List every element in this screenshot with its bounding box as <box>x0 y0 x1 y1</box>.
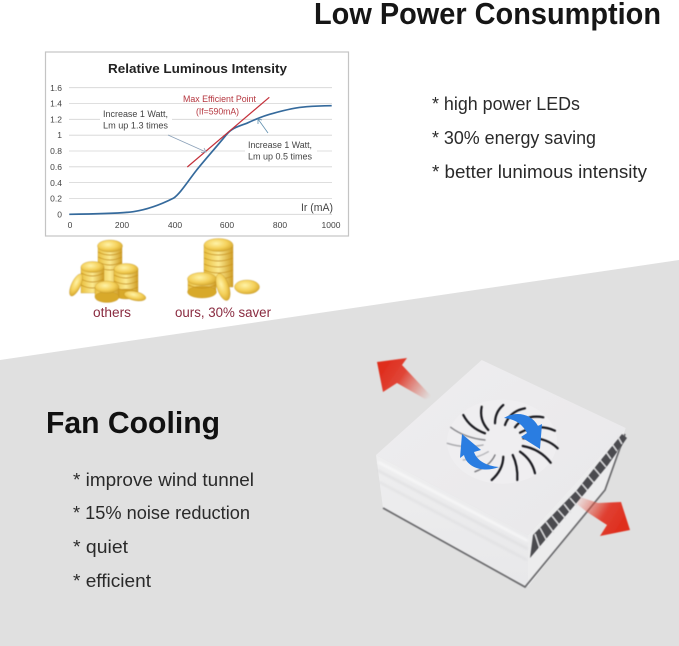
chart: relative luminous intensity: Relative Luminous Intensity <box>108 61 288 76</box>
chart: relative luminous intensity: 600 <box>220 220 234 230</box>
chart: relative luminous intensity: 1.2 <box>50 114 62 124</box>
text: cooling bullets: * quiet <box>73 537 128 557</box>
text: power bullets <box>432 94 647 182</box>
chart: relative luminous intensity: 1000 <box>322 220 341 230</box>
box drop shadow edges <box>383 434 625 587</box>
chart: relative luminous intensity: 0.6 <box>50 162 62 172</box>
chart: relative luminous intensity: 1 <box>57 130 62 140</box>
arrow: to flat section <box>258 119 268 133</box>
heading: fan cooling: Fan Cooling <box>46 405 220 440</box>
efficiency curve <box>69 106 332 214</box>
callout: max efficient point: (If=590mA) <box>196 106 239 116</box>
text: ours caption: ours, 30% saver <box>175 305 271 320</box>
chart: relative luminous intensity: 0.8 <box>50 146 62 156</box>
text: power bullets: * 30% energy saving <box>432 128 596 148</box>
icon: others coin pile <box>67 240 147 303</box>
chart: relative luminous intensity: 0 <box>68 220 73 230</box>
panel: grey diagonal background <box>0 260 679 646</box>
chart label masks <box>100 108 317 164</box>
chart: relative luminous intensity: 1.4 <box>50 98 62 108</box>
text: power bullets: * high power LEDs <box>432 94 580 114</box>
callout: increase 0.5 times: Increase 1 Watt, <box>248 140 312 150</box>
text: cooling bullets: * improve wind tunnel <box>73 470 254 490</box>
chart: relative luminous intensity: 800 <box>273 220 287 230</box>
chart: relative luminous intensity: 0 <box>57 210 62 220</box>
text: others caption: others <box>93 305 131 320</box>
fan recess <box>447 400 557 484</box>
arrow: red exhaust upper left <box>377 358 432 399</box>
callout: max efficient point <box>183 94 256 116</box>
vent grille <box>530 434 627 558</box>
box rim highlights <box>377 462 528 560</box>
axis label: Ir (mA) <box>301 202 333 214</box>
chart: relative luminous intensity: 200 <box>115 220 129 230</box>
callout: max efficient point: Max Efficient Point <box>183 94 256 104</box>
box top face <box>376 360 626 535</box>
box right face <box>528 428 626 587</box>
chart: relative luminous intensity: 0.4 <box>50 178 62 188</box>
text: cooling bullets <box>73 470 254 591</box>
arrow: to steep section <box>168 135 206 152</box>
text: cooling bullets: * efficient <box>73 571 151 591</box>
callout: increase 1.3 times: Lm up 1.3 times <box>103 120 169 130</box>
illustration: fan cooling box <box>376 360 627 587</box>
icon: ours coin pile <box>188 238 260 302</box>
text: cooling bullets: * 15% noise reduction <box>73 503 250 523</box>
callout: increase 1.3 times <box>103 109 169 130</box>
fan blades <box>447 405 558 480</box>
chart: relative luminous intensity <box>46 52 348 236</box>
blue rotation arrow right <box>504 414 542 449</box>
blue rotation arrow left <box>460 434 499 470</box>
callout: increase 0.5 times: Lm up 0.5 times <box>248 152 313 162</box>
text: power bullets: * better lunimous intensity <box>432 162 647 182</box>
chart: relative luminous intensity: 0.2 <box>50 194 62 204</box>
chart: relative luminous intensity: 1.6 <box>50 83 62 93</box>
callout: increase 1.3 times: Increase 1 Watt, <box>103 109 168 119</box>
tangent line <box>187 97 269 167</box>
chart: relative luminous intensity: 400 <box>168 220 182 230</box>
box left face <box>376 455 528 587</box>
arrow: red exhaust lower right <box>577 497 630 536</box>
callout: increase 0.5 times <box>248 140 313 162</box>
